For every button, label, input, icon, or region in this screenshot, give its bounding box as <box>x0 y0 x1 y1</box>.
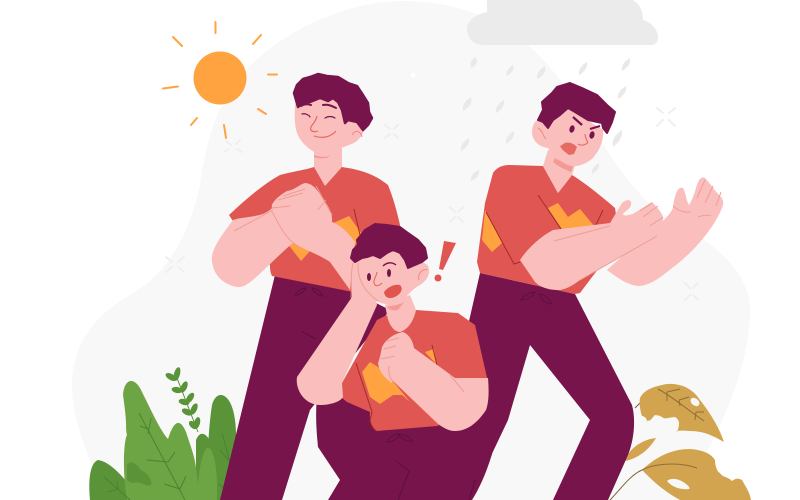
arm and hands <box>212 183 355 290</box>
plant: sprig <box>164 366 201 432</box>
nose and smile <box>311 116 336 137</box>
eyebrows and closed eyes <box>301 104 336 118</box>
pants <box>316 380 500 500</box>
shirt <box>342 310 488 431</box>
ear <box>419 269 427 280</box>
man 2: worried <box>297 224 500 500</box>
pants <box>220 275 390 500</box>
hand creases <box>351 263 378 301</box>
nose <box>578 134 588 145</box>
shirt <box>229 167 400 300</box>
arm creases <box>234 186 332 247</box>
shirt yellow pattern <box>362 349 437 404</box>
hair <box>294 74 372 130</box>
sparkles <box>166 108 698 300</box>
drawstring <box>387 434 412 442</box>
drawstring <box>295 288 323 296</box>
worried eyebrows and eyes <box>367 263 396 281</box>
ear <box>538 128 546 139</box>
ear <box>352 131 362 137</box>
cloud <box>467 0 658 45</box>
plant: green bush <box>89 366 236 500</box>
shirt <box>477 165 620 294</box>
hair <box>351 224 427 268</box>
man 3: angry <box>440 83 723 500</box>
hand and left arm <box>297 262 377 405</box>
nose <box>374 272 382 286</box>
neck <box>543 150 577 193</box>
angry eyebrows and eyes <box>569 117 600 139</box>
man 1: happy <box>212 74 400 500</box>
shirt yellow pattern <box>287 216 362 261</box>
head <box>532 108 603 166</box>
head <box>295 85 365 155</box>
drawstring <box>521 292 552 304</box>
head <box>358 240 429 304</box>
mouth <box>560 143 577 155</box>
fold line <box>354 209 360 235</box>
rain drops <box>461 57 630 181</box>
plant: golden leaves <box>610 384 751 500</box>
shirt yellow pattern <box>482 203 595 252</box>
mouth <box>384 285 402 298</box>
hair <box>538 83 615 133</box>
right arm and fist <box>378 332 489 431</box>
back hand creases <box>673 180 721 217</box>
fist creases <box>381 338 464 392</box>
sun <box>163 22 277 138</box>
fold lines <box>356 345 437 431</box>
fold lines <box>486 195 603 264</box>
back arm <box>607 177 723 286</box>
front arm creases <box>554 203 663 280</box>
front arm <box>520 200 663 290</box>
pants <box>440 273 634 500</box>
neck <box>314 148 342 186</box>
small white dot <box>410 72 416 78</box>
pant folds <box>301 331 475 500</box>
exclamation mark <box>434 241 456 282</box>
neck <box>385 295 416 332</box>
